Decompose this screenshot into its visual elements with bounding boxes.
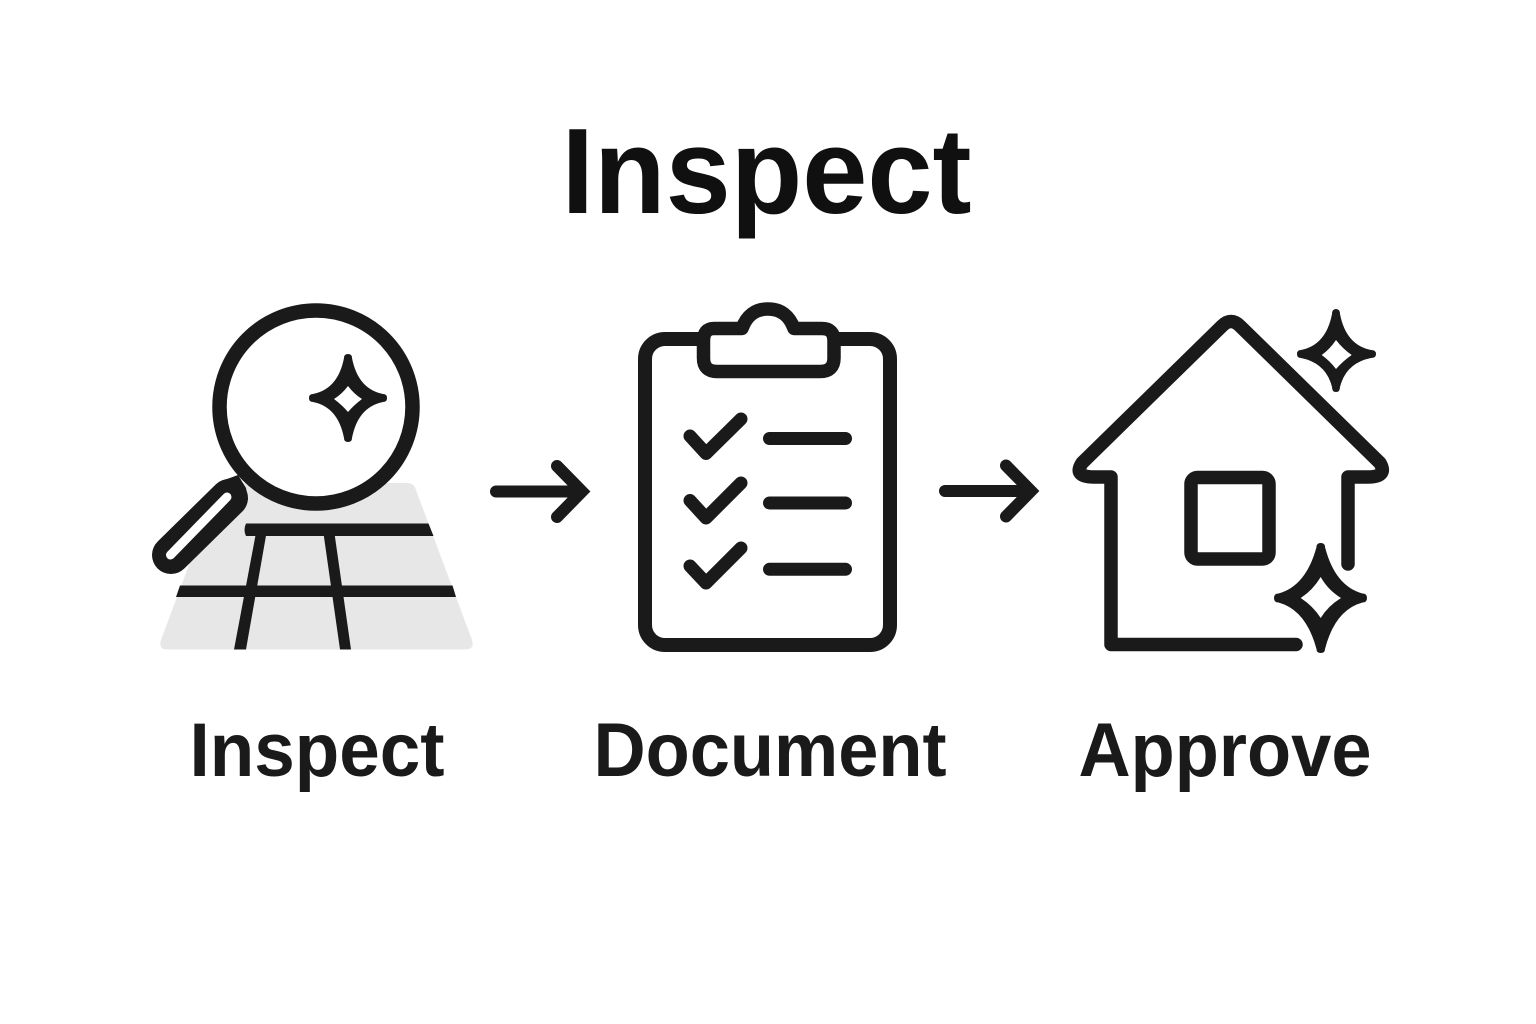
sparkle in lens [309,354,387,442]
title: Inspect [562,103,972,239]
small sparkle [1297,309,1376,392]
icon: clean house with sparkles [1079,309,1382,653]
handle neck [224,475,248,500]
magnifier lens [220,310,412,504]
label: Document: Document [594,708,946,793]
icon: clipboard checklist [645,309,890,645]
checklist rows [690,419,846,583]
arrow: document to approve [945,466,1031,516]
clipboard clip [704,309,834,372]
arrow: inspect to document [496,466,582,517]
magnifier handle [171,498,229,555]
icon: magnifying glass over tiled floor [160,310,473,650]
large sparkle [1274,543,1367,653]
floor tile [160,483,473,650]
label: Inspect: Inspect [190,708,444,793]
handle slot [170,497,227,555]
clipboard body [645,339,890,645]
label: Approve: Approve [1078,708,1372,793]
floor grid lines [176,524,456,650]
house window [1191,478,1269,559]
house outline [1079,322,1382,644]
